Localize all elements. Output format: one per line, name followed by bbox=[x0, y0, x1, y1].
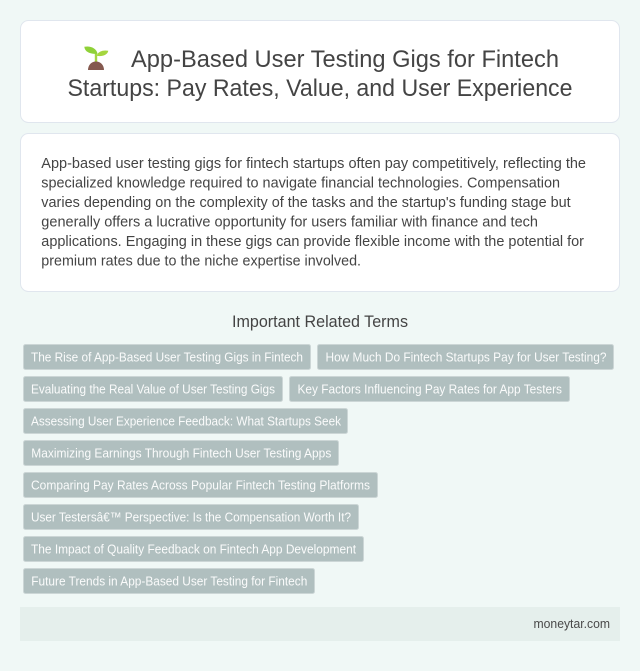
title: App-Based User Testing Gigs for Fintech bbox=[131, 46, 559, 73]
text block: summary bbox=[41, 156, 586, 270]
tag bbox=[24, 344, 310, 370]
tag bbox=[24, 536, 364, 562]
tag: Key Factors Influencing Pay Rates for App Testers bbox=[298, 382, 562, 396]
tag bbox=[24, 440, 338, 466]
panel: title card bbox=[20, 20, 620, 122]
panel: related term tags bbox=[24, 344, 614, 594]
tag: The Impact of Quality Feedback on Fintech App Development bbox=[31, 542, 356, 556]
tag: Assessing User Experience Feedback: What Startups Seek bbox=[31, 414, 341, 428]
heading: related terms: Important Related Terms bbox=[232, 313, 408, 331]
text block: summary: generally offers a lucrative opportunity for users familiar with finance and tech bbox=[41, 214, 538, 230]
tag: User Testersâ€™ Perspective: Is the Compensation Worth It? bbox=[31, 510, 351, 524]
text block: summary: varies depending on the complexity of the tasks and the startup's funding stage but bbox=[41, 195, 571, 211]
text block: summary: applications. Engaging in these gigs can provide flexible income with the potential for bbox=[41, 234, 584, 250]
footer bbox=[20, 607, 620, 641]
tag: Comparing Pay Rates Across Popular Fintech Testing Platforms bbox=[31, 478, 370, 492]
tag bbox=[24, 376, 282, 402]
tag: Future Trends in App-Based User Testing for Fintech bbox=[31, 574, 307, 588]
text block: summary: premium rates due to the niche expertise involved. bbox=[41, 254, 361, 270]
text block: summary: App-based user testing gigs for fintech startups often pay competitively, reflecting the bbox=[41, 156, 586, 172]
icon: sprout bbox=[84, 46, 108, 70]
tag bbox=[24, 472, 378, 498]
tag: How Much Do Fintech Startups Pay for User Testing? bbox=[326, 350, 606, 364]
title: Startups: Pay Rates, Value, and User Experience bbox=[68, 75, 572, 102]
text block: summary: specialized knowledge required to navigate financial technologies. Compensation bbox=[41, 176, 560, 192]
tag bbox=[24, 408, 348, 434]
tag: Evaluating the Real Value of User Testing Gigs bbox=[31, 382, 275, 396]
tag bbox=[24, 504, 358, 530]
title bbox=[68, 46, 572, 102]
panel: summary card bbox=[20, 134, 620, 292]
footer: moneytar.com bbox=[534, 616, 610, 631]
tag bbox=[24, 568, 314, 594]
tag: The Rise of App-Based User Testing Gigs in Fintech bbox=[31, 350, 303, 364]
tag bbox=[290, 376, 570, 402]
tag: Maximizing Earnings Through Fintech User Testing Apps bbox=[31, 446, 332, 460]
tag bbox=[318, 344, 614, 370]
